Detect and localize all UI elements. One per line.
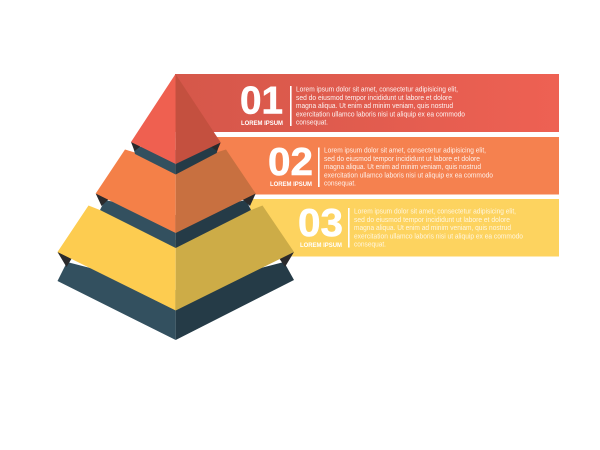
tier 2: orange — [96, 150, 256, 233]
text block 02: exercitation ullamco laboris nisi ut aliquip ex ea commodo — [324, 172, 493, 179]
divider 01 — [290, 86, 292, 126]
panel: band 01 — [175, 74, 559, 132]
label 01: LOREM IPSUM — [241, 120, 283, 127]
text block 01: Lorem ipsum dolor sit amet, consectetur adipisicing elit, — [296, 86, 458, 94]
tier 3 base: dark slate — [58, 252, 294, 340]
text block 01: sed do eiusmod tempor incididunt ut labore et dolore — [296, 95, 452, 102]
pyramid — [58, 74, 294, 340]
divider 02 — [318, 148, 320, 187]
tier 1 base: dark slate — [131, 142, 221, 174]
text block 02: Lorem ipsum dolor sit amet, consectetur adipisicing elit, — [324, 148, 486, 154]
text block 01: exercitation ullamco laboris nisi ut aliquip ex ea commodo — [296, 111, 465, 118]
text block 03: magna aliqua. Ut enim ad minim veniam, quis nostrud — [354, 225, 511, 232]
text block 01 — [296, 86, 465, 127]
tier 1: red apex — [131, 74, 221, 164]
number 02: 02 — [268, 141, 313, 184]
text block 02: sed do eiusmod tempor incididunt ut labore et dolore — [324, 156, 480, 163]
text block 03: exercitation ullamco laboris nisi ut aliquip ex ea commodo — [354, 233, 523, 240]
text block 03: sed do eiusmod tempor incididunt ut labore et dolore — [354, 217, 510, 224]
panel: band 03 — [250, 199, 559, 256]
text block 03: consequat. — [354, 242, 386, 249]
number 03: 03 — [298, 202, 343, 245]
divider 03 — [348, 208, 350, 248]
text block 02: consequat. — [324, 181, 356, 188]
text block 03 — [354, 208, 523, 249]
panel: band 02 — [215, 137, 559, 194]
text block 02: magna aliqua. Ut enim ad minim veniam, quis nostrud — [324, 164, 481, 171]
text block 01: magna aliqua. Ut enim ad minim veniam, quis nostrud — [296, 103, 453, 110]
text block 03: Lorem ipsum dolor sit amet, consectetur adipisicing elit, — [354, 208, 516, 216]
tier 3: yellow — [58, 206, 294, 310]
tier 2 base: dark slate — [96, 194, 256, 248]
label 03: LOREM IPSUM — [300, 242, 342, 249]
text block 02 — [324, 148, 493, 188]
number 01: 01 — [240, 80, 283, 122]
label 02: LOREM IPSUM — [270, 181, 312, 188]
text block 01: consequat. — [296, 120, 328, 127]
